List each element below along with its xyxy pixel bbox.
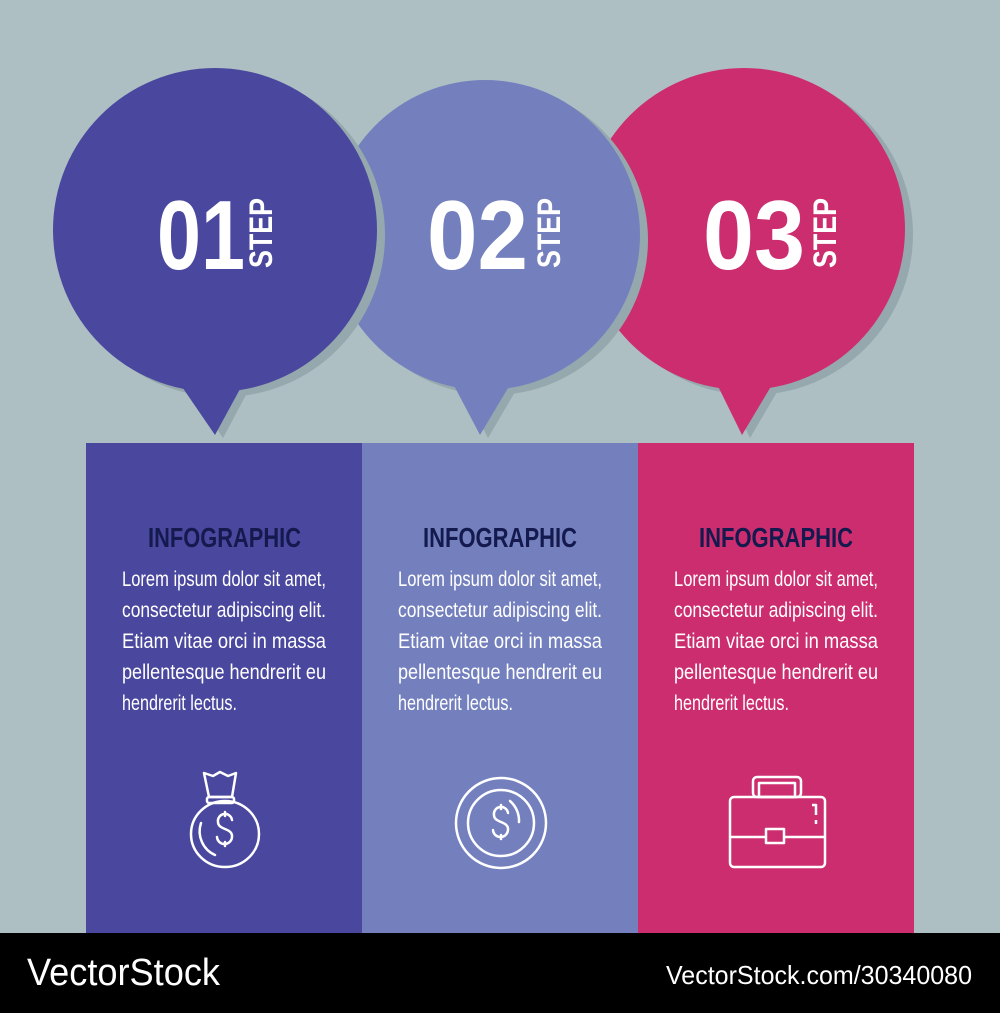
body 2 [398, 568, 602, 715]
body 3: hendrerit lectus. [674, 692, 789, 715]
bubble 2: STEP [531, 198, 567, 268]
bubble 1: STEP [243, 198, 279, 268]
body 2: Etiam vitae orci in massa [398, 630, 602, 653]
body 3: Etiam vitae orci in massa [674, 630, 878, 653]
body 2: Lorem ipsum dolor sit amet, [398, 568, 602, 591]
bubble 3: 03 [703, 180, 805, 290]
icon: coin [456, 778, 546, 868]
body 3: pellentesque hendrerit eu [674, 661, 878, 684]
body 1: pellentesque hendrerit eu [122, 661, 326, 684]
panel 2 [362, 443, 638, 933]
body 1 [122, 568, 326, 715]
heading 1: INFOGRAPHIC [148, 522, 301, 553]
body 2: hendrerit lectus. [398, 692, 513, 715]
bubble 1 [53, 68, 385, 438]
body 1: Etiam vitae orci in massa [122, 630, 326, 653]
body 3: Lorem ipsum dolor sit amet, [674, 568, 878, 591]
heading 3: INFOGRAPHIC [699, 522, 853, 553]
body 1: consectetur adipiscing elit. [122, 599, 326, 622]
footer bar [0, 933, 1000, 1013]
heading 2: INFOGRAPHIC [423, 522, 577, 553]
body 3 [674, 568, 878, 715]
bubble 2: 02 [427, 180, 528, 290]
panel 1 [86, 443, 362, 933]
body 2: consectetur adipiscing elit. [398, 599, 602, 622]
body 2: pellentesque hendrerit eu [398, 661, 602, 684]
body 3: consectetur adipiscing elit. [674, 599, 878, 622]
bubble 3 [583, 68, 913, 438]
footer brand: VectorStock [27, 952, 221, 994]
bubble 3: STEP [807, 198, 843, 268]
panel 3 [638, 443, 914, 933]
bubble 2 [330, 80, 648, 438]
icon: briefcase [730, 777, 825, 867]
body 1: hendrerit lectus. [122, 692, 237, 715]
footer url: VectorStock.com/30340080 [666, 960, 972, 990]
bubble 1: 01 [157, 180, 245, 290]
icon: money bag [191, 772, 259, 867]
body 1: Lorem ipsum dolor sit amet, [122, 568, 326, 591]
